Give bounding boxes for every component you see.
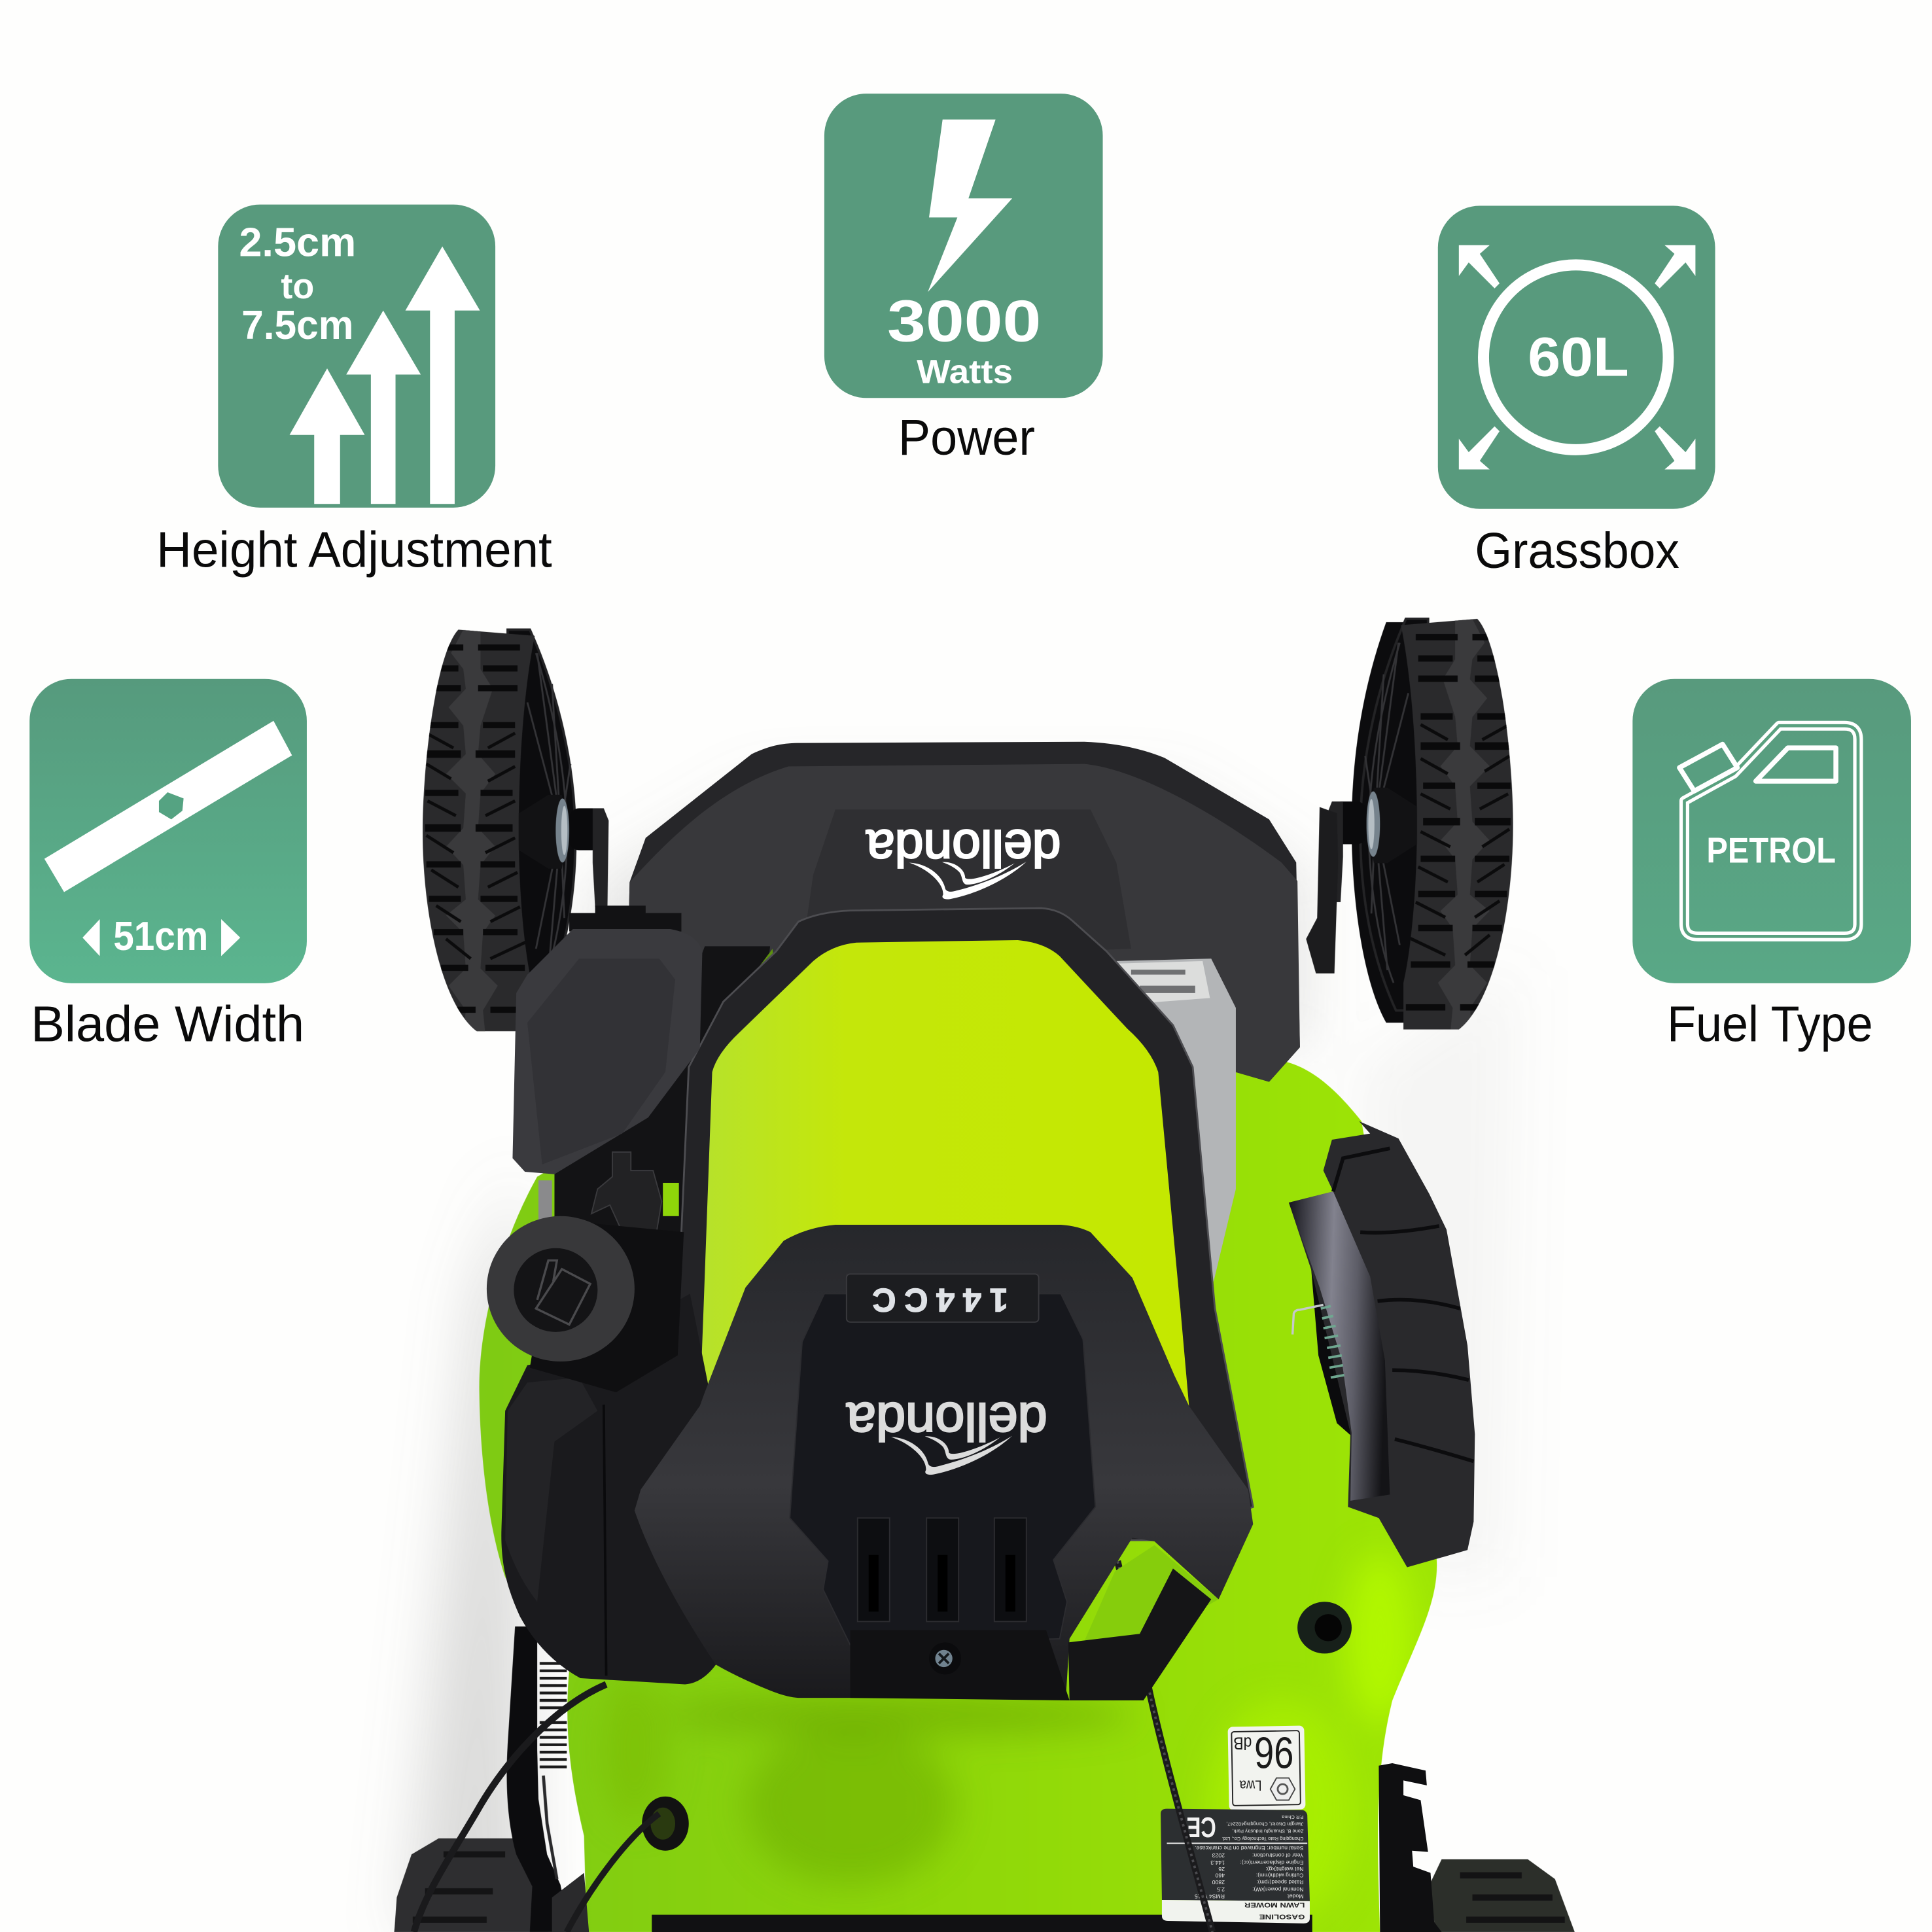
rear left wheel <box>419 622 608 1035</box>
logo panel <box>801 809 1131 961</box>
lower bracket <box>850 1630 1070 1700</box>
panel: height adjustment <box>218 205 495 508</box>
spring <box>540 1663 567 1767</box>
rear bracket <box>1379 1763 1441 1932</box>
height range text: to <box>281 266 314 306</box>
green mower deck <box>480 1060 1437 1932</box>
throttle cables <box>414 1684 659 1932</box>
heading: height adjustment: Height Adjustment <box>156 521 552 578</box>
deck side flap <box>552 1873 589 1932</box>
rear right wheel rim <box>1352 622 1417 1023</box>
heading: power: Power <box>898 410 1035 466</box>
mechanism behind engine cover <box>554 946 770 1380</box>
engine cover frame <box>635 908 1253 1540</box>
fuel cap <box>487 1216 635 1361</box>
glossy grip band <box>1289 1191 1390 1501</box>
panel: blade width <box>29 679 307 983</box>
handle hook <box>1293 1305 1324 1335</box>
cable grommets <box>591 1152 661 1238</box>
green window <box>663 1183 679 1216</box>
right wheel arm <box>1306 807 1338 974</box>
specification label: Model: <box>1287 1893 1304 1900</box>
fuel tank <box>501 1293 727 1684</box>
noise level sticker: 96 <box>1254 1727 1293 1776</box>
specification label: Rated speed(rpm): <box>1256 1879 1304 1886</box>
dark centre panel <box>790 1274 1095 1645</box>
front right wheel <box>1430 1859 1575 1932</box>
icon: lightning bolt <box>928 120 1012 292</box>
handle spring bracket <box>1311 1267 1358 1441</box>
specification label: Year of construction: <box>1252 1852 1304 1859</box>
icon: petrol can <box>1679 726 1858 936</box>
power unit: Watts <box>917 353 1013 391</box>
specification label: CE <box>1187 1811 1216 1842</box>
specification label: 460 <box>1215 1872 1225 1879</box>
silver rod <box>538 1180 552 1220</box>
icon: width arrows <box>82 919 240 956</box>
heading: fuel type: Fuel Type <box>1667 996 1873 1052</box>
centre screw <box>929 1642 961 1674</box>
panel: fuel type <box>1632 679 1911 983</box>
icon: capacity circle <box>1483 265 1668 449</box>
specification label: Net weight(kg): <box>1265 1866 1304 1872</box>
specification label: Cutting width(mm): <box>1256 1872 1304 1879</box>
handle frame bar <box>507 1626 569 1932</box>
specification label: Engine displacement(cc): <box>1240 1859 1304 1866</box>
noise level sticker: Lwa <box>1239 1777 1261 1793</box>
specification label: 26 <box>1218 1866 1225 1872</box>
icon: expansion arrows <box>1459 245 1695 470</box>
heading: grassbox: Grassbox <box>1475 523 1679 579</box>
deck hole left <box>642 1797 689 1851</box>
silver engine part <box>1109 958 1236 1282</box>
capacity value: 60L <box>1528 325 1629 387</box>
fuel name: PETROL <box>1706 830 1836 870</box>
heading: blade width: Blade Width <box>31 996 304 1052</box>
vent slots <box>858 1518 1027 1621</box>
specification label: 2.5 <box>1217 1886 1225 1893</box>
starter pull cord <box>1117 1561 1212 1932</box>
handle spring <box>1321 1306 1344 1378</box>
lime engine cover <box>700 940 1189 1406</box>
specification label: Serial number: Engraved on the crankcase. <box>1195 1845 1304 1852</box>
dellonda logo lower: dellonda <box>846 1392 1047 1450</box>
rear housing <box>628 742 1300 1082</box>
panel: power <box>824 94 1103 398</box>
background soft shadows <box>406 788 1515 1932</box>
rear right wheel <box>1327 611 1517 1033</box>
spring hook rod <box>544 1776 557 1879</box>
power value: 3000 <box>887 289 1041 355</box>
bottom black strip <box>652 1915 1312 1932</box>
icon: mower blade <box>44 721 292 892</box>
specification label: 2023 <box>1212 1852 1225 1859</box>
specification label: Nominal power(kW): <box>1252 1886 1304 1893</box>
left upper box <box>512 905 702 1174</box>
specification label <box>1161 1809 1310 1923</box>
model plate: 144CC <box>872 1282 1008 1318</box>
recoil opening <box>1084 1545 1219 1642</box>
cap mount body <box>530 1220 684 1392</box>
height range text <box>239 220 356 348</box>
specification label: Zone B, Shuangfu Industry Park, <box>1232 1829 1304 1835</box>
noise level sticker: dB <box>1233 1733 1252 1753</box>
icon: rising arrows <box>290 247 480 504</box>
specification label: GASOLINE <box>1259 1913 1305 1921</box>
blade width value: 51cm <box>113 914 208 959</box>
cutting height handle <box>1289 1121 1475 1568</box>
small green gap <box>754 949 774 981</box>
specification label: Jiangjin District, Chongqing402247, <box>1226 1821 1304 1827</box>
height range text: 2.5cm <box>239 220 356 266</box>
cable guard bracket <box>1068 1568 1211 1700</box>
specification label: 144.3 <box>1210 1859 1225 1866</box>
model plate <box>847 1274 1039 1322</box>
specification label: RMS4 V115 <box>1195 1893 1225 1900</box>
deck fixing hole right <box>1297 1602 1352 1653</box>
specification label: 2800 <box>1212 1879 1225 1886</box>
noise level sticker <box>1228 1725 1306 1811</box>
dellonda logo top: dellonda <box>866 819 1061 877</box>
specification label: P.R China <box>1281 1814 1304 1820</box>
panel: grassbox <box>1438 206 1715 509</box>
specification label: LAWN MOWER <box>1244 1901 1305 1909</box>
specification label: Chongqing Rato Technology Co., Ltd. <box>1222 1836 1304 1842</box>
front left wheel <box>395 1838 548 1932</box>
height range text: 7.5cm <box>241 303 354 348</box>
